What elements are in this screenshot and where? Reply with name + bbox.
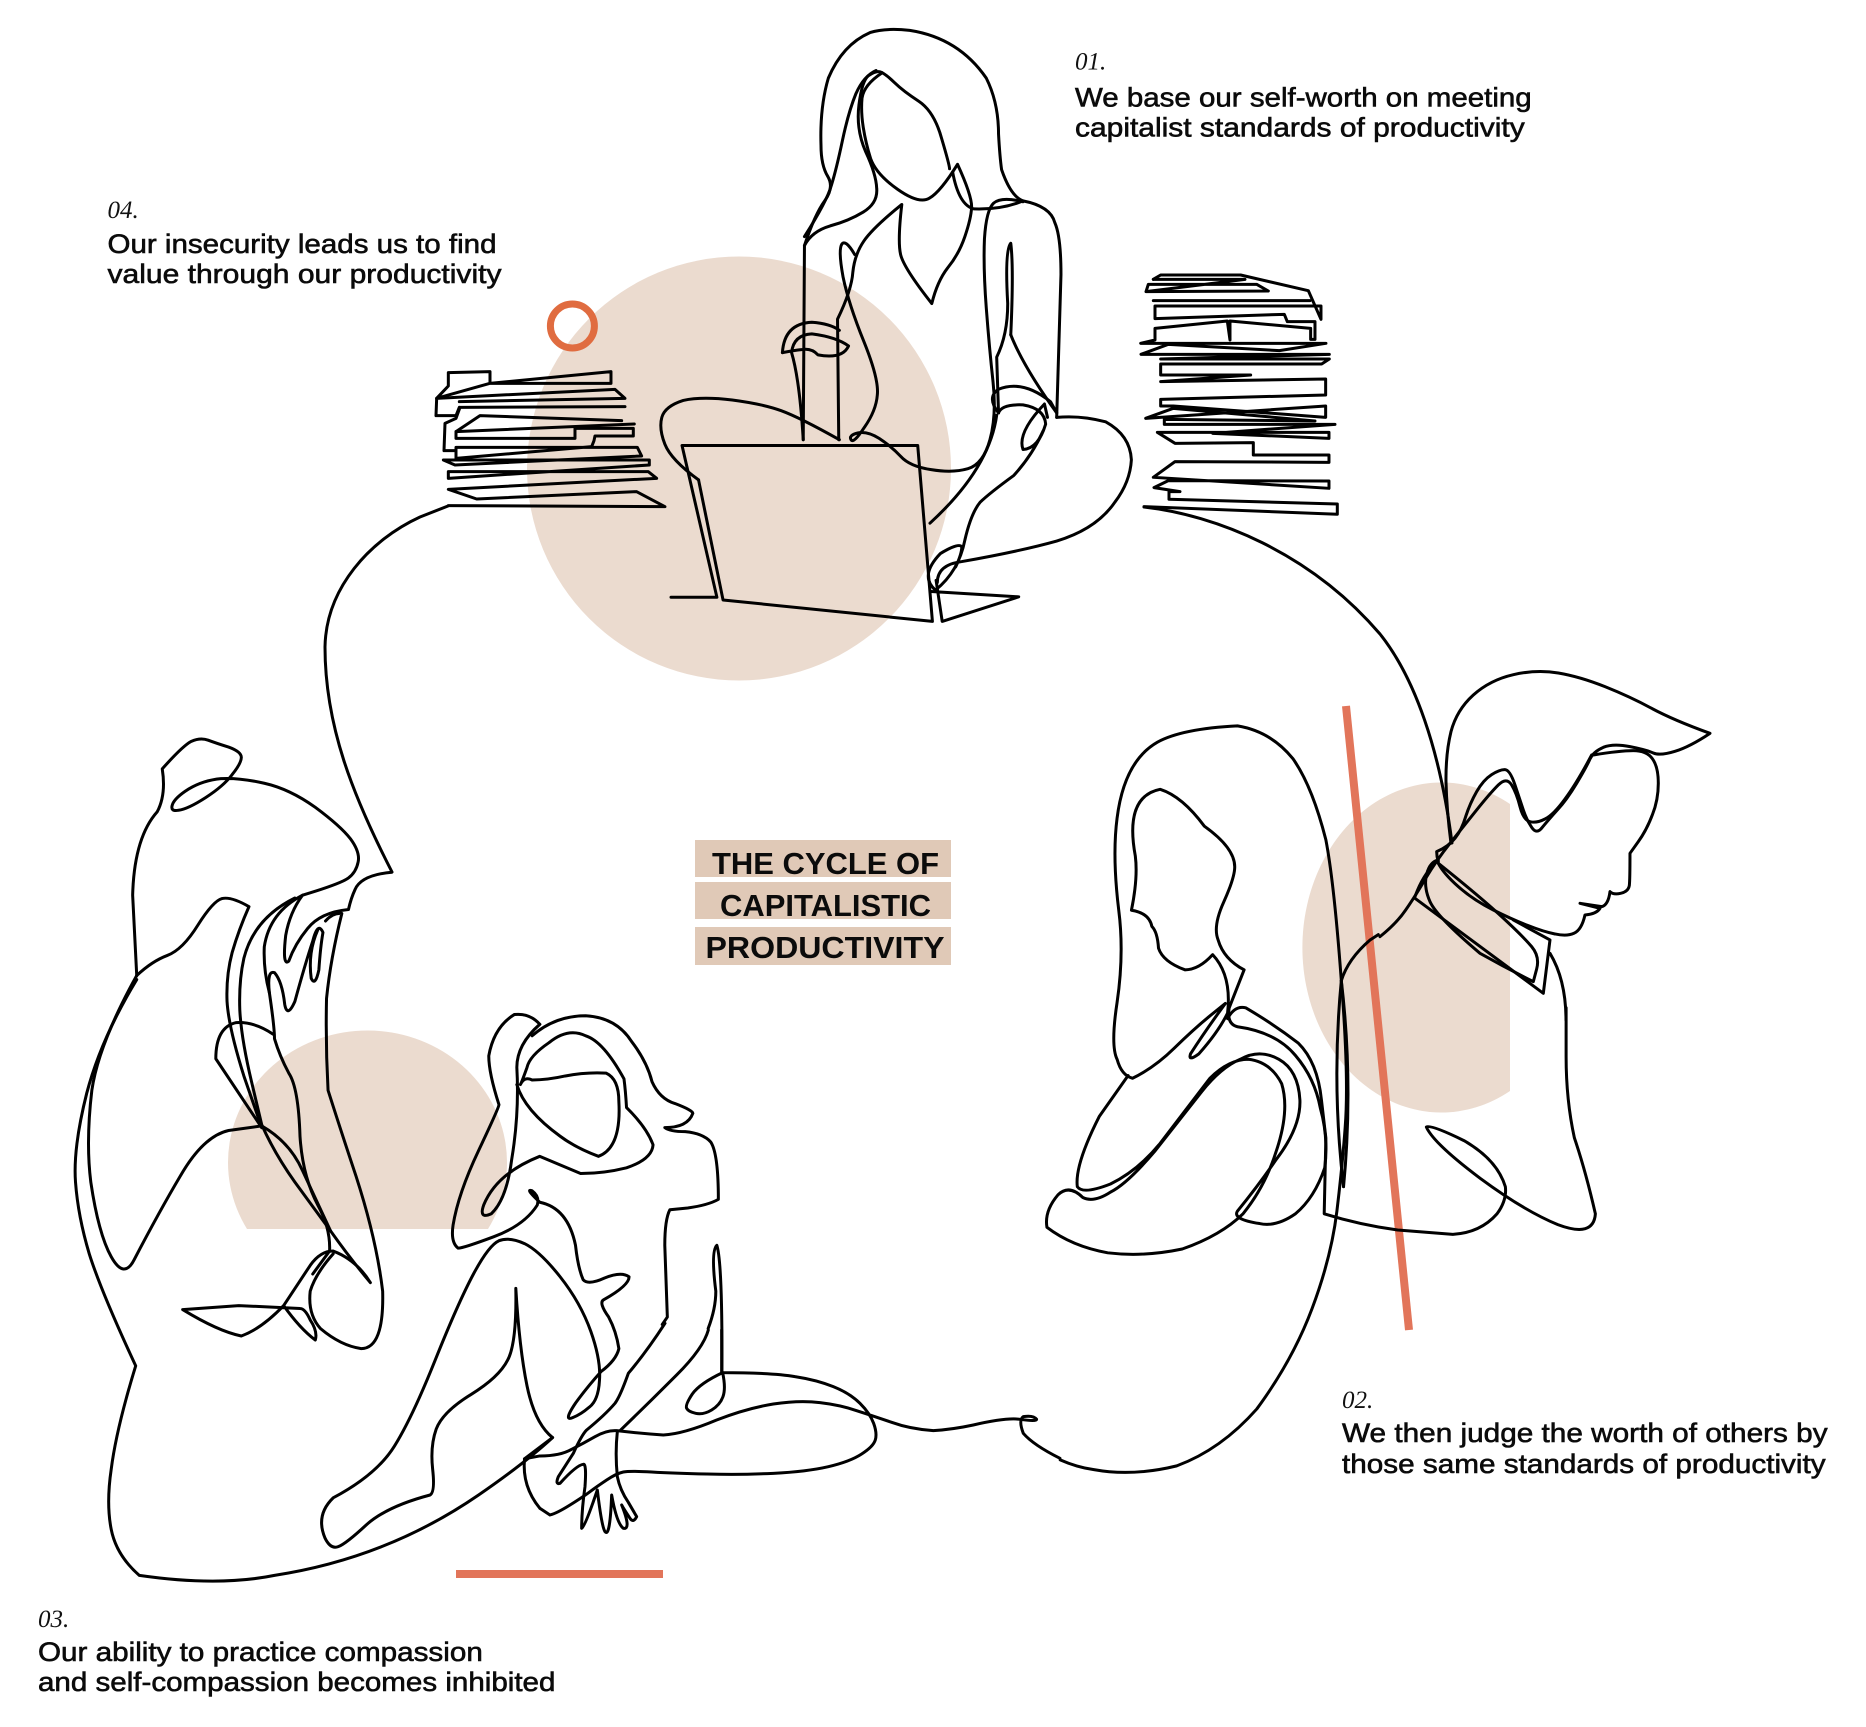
step 02 text: those same standards of productivity <box>1342 1449 1826 1479</box>
step 01 text <box>1075 49 1532 142</box>
step 01 text: capitalist standards of productivity <box>1075 112 1525 142</box>
connector line: right stack to man's head <box>1144 507 1452 843</box>
title: PRODUCTIVITY <box>706 930 945 965</box>
laptop <box>671 446 932 621</box>
illustration: seated figure's outstretched leg, hand and wave to couple <box>540 1323 1060 1533</box>
step 03 text: 03. <box>38 1606 69 1633</box>
background circle: left (clipped) <box>228 1030 507 1229</box>
step 04 text: 04. <box>108 197 139 224</box>
accent: orange bottom bar <box>456 1570 663 1578</box>
background circle: right (clipped) <box>1302 783 1510 1112</box>
step 03 text <box>38 1606 555 1697</box>
step 04 text: value through our productivity <box>108 259 502 289</box>
illustration: left paper stack <box>436 372 665 507</box>
illustration: seated pair <box>75 739 722 1581</box>
step 02 text: 02. <box>1342 1387 1373 1414</box>
step 01 text: 01. <box>1075 49 1106 76</box>
step 04 text: Our insecurity leads us to find <box>108 229 496 259</box>
accent: orange diagonal line <box>1346 706 1409 1330</box>
step 01 text: We base our self-worth on meeting <box>1075 82 1532 112</box>
illustration: right paper stack <box>1141 275 1337 514</box>
step 04 text <box>108 197 502 289</box>
title: THE CYCLE OF <box>712 846 939 881</box>
step 02 text: We then judge the worth of others by <box>1342 1418 1828 1448</box>
step 02 text <box>1342 1387 1828 1479</box>
step 03 text: Our ability to practice compassion <box>38 1637 483 1667</box>
illustration: woman at laptop <box>661 29 1131 621</box>
title <box>695 840 951 965</box>
woman <box>1046 726 1341 1254</box>
background circle: top <box>527 256 951 680</box>
step 03 text: and self-compassion becomes inhibited <box>38 1667 555 1697</box>
title: CAPITALISTIC <box>720 888 931 923</box>
illustration: man's head and collar <box>1380 672 1710 1020</box>
connector line: left stack to seated figure <box>325 506 448 872</box>
accent: orange ring <box>550 304 594 348</box>
man's body <box>1228 1007 1595 1234</box>
illustration: couple back to back <box>1046 726 1595 1472</box>
